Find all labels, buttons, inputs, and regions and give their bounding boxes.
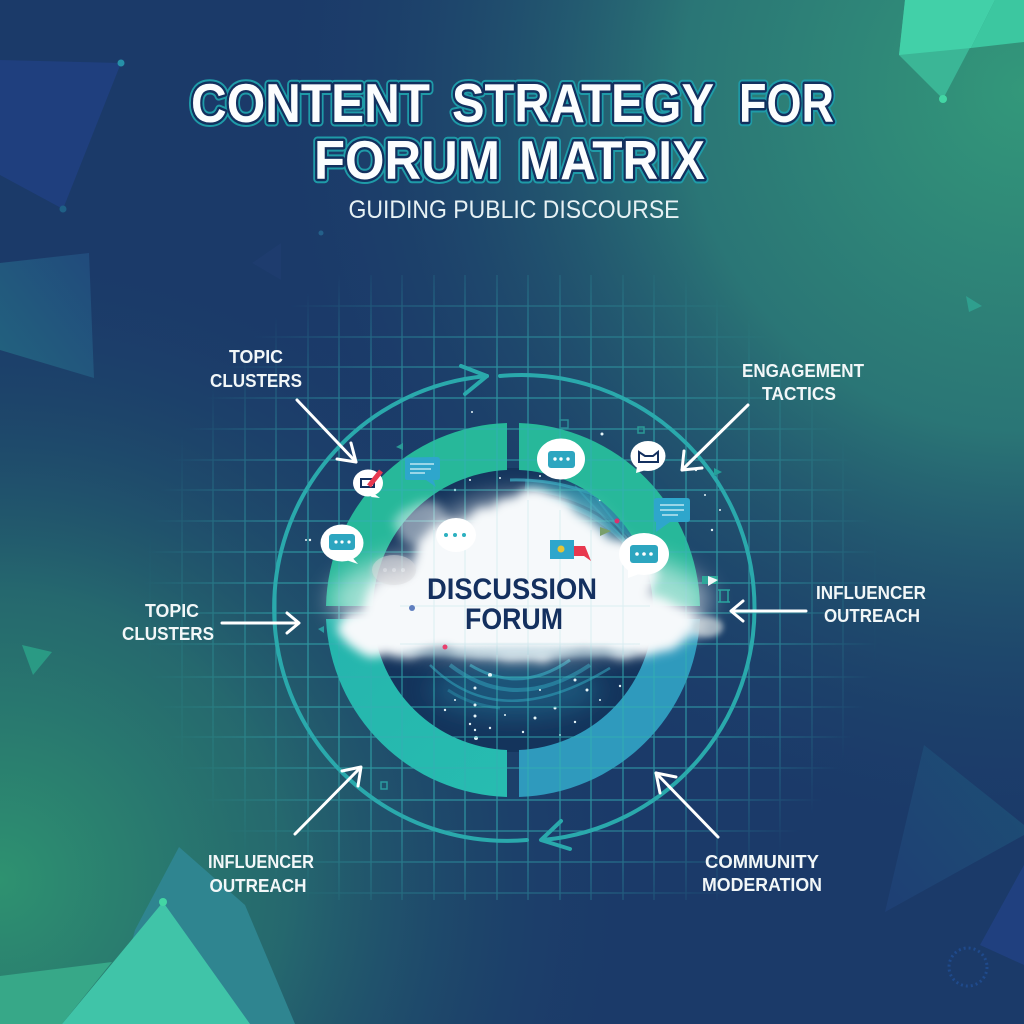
decorative polygons: top right [899, 0, 1024, 312]
title: STRATEGY [452, 72, 714, 134]
label: topic clusters left: TOPIC [145, 601, 199, 621]
label: topic clusters top [210, 347, 302, 391]
title: CONTENT [191, 72, 430, 134]
title: STRATEGY [452, 72, 714, 134]
label: community moderation: MODERATION [702, 875, 822, 895]
accent particles [318, 420, 730, 789]
title: STRATEGY [452, 72, 714, 134]
label: community moderation: COMMUNITY [705, 852, 819, 872]
label: influencer outreach right: OUTREACH [824, 606, 920, 626]
decorative polygons: bottom right [885, 745, 1024, 986]
label: topic clusters left: CLUSTERS [122, 624, 214, 644]
title: MATRIX [519, 129, 705, 191]
icon: flag [550, 540, 591, 561]
label: topic clusters top: CLUSTERS [210, 371, 302, 391]
label: influencer outreach bottom: OUTREACH [210, 876, 306, 896]
title: FORUM [314, 129, 500, 191]
arrow: influencer outreach right [731, 601, 806, 621]
arrow: topic clusters top [297, 400, 356, 462]
title: FORUM [314, 129, 500, 191]
title: CONTENT [191, 72, 430, 134]
cloud [330, 494, 723, 658]
title: MATRIX [519, 129, 705, 191]
title [191, 72, 834, 191]
arrow: engagement tactics [682, 405, 748, 470]
label: influencer outreach right [816, 583, 926, 626]
label: topic clusters left [122, 601, 214, 644]
label: influencer outreach bottom [208, 852, 314, 896]
icon: chat bubble with pencil [353, 470, 383, 498]
title: FOR [739, 72, 834, 134]
ring segment: top left [326, 423, 507, 606]
decorative polygons: top left [0, 60, 324, 378]
label: influencer outreach right: INFLUENCER [816, 583, 926, 603]
title: FORUM [314, 129, 500, 191]
icon: chat bubble left [320, 524, 364, 564]
label: influencer outreach bottom: INFLUENCER [208, 852, 314, 872]
icon: chat bubble faded left [372, 555, 416, 585]
subtitle: GUIDING PUBLIC DISCOURSE [348, 196, 680, 224]
label: engagement tactics [742, 361, 864, 404]
label: community moderation [702, 852, 822, 895]
arrow: influencer outreach bottom [295, 767, 361, 834]
circular arrow: right arc [500, 375, 754, 849]
center label: discussion forum: DISCUSSION [427, 573, 597, 606]
ring segment: top right [519, 423, 700, 606]
central dark disc with particles [305, 411, 721, 752]
icon: blue message top left [405, 457, 440, 487]
arrow: topic clusters left [222, 613, 299, 633]
title: MATRIX [519, 129, 705, 191]
icon: chat bubble with envelope [630, 441, 666, 473]
decorative polygons: bottom left [0, 645, 295, 1024]
circular arrow: left arc [274, 366, 527, 841]
icon: chat bubble top center [537, 438, 585, 480]
icon: chat bubble center [436, 518, 476, 552]
title: CONTENT [191, 72, 430, 134]
icon: chat bubble right [619, 533, 669, 578]
ring segment: bottom right [519, 619, 700, 797]
label: engagement tactics: ENGAGEMENT [742, 361, 864, 381]
center label: discussion forum [427, 573, 597, 636]
label: topic clusters top: TOPIC [229, 347, 283, 367]
ring segment: bottom left [326, 619, 507, 797]
arrow: community moderation [656, 773, 718, 837]
icon: blue message right [654, 498, 690, 532]
title: FOR [739, 72, 834, 134]
title: FOR [739, 72, 834, 134]
label: engagement tactics: TACTICS [762, 384, 836, 404]
center label: discussion forum: FORUM [465, 603, 563, 636]
